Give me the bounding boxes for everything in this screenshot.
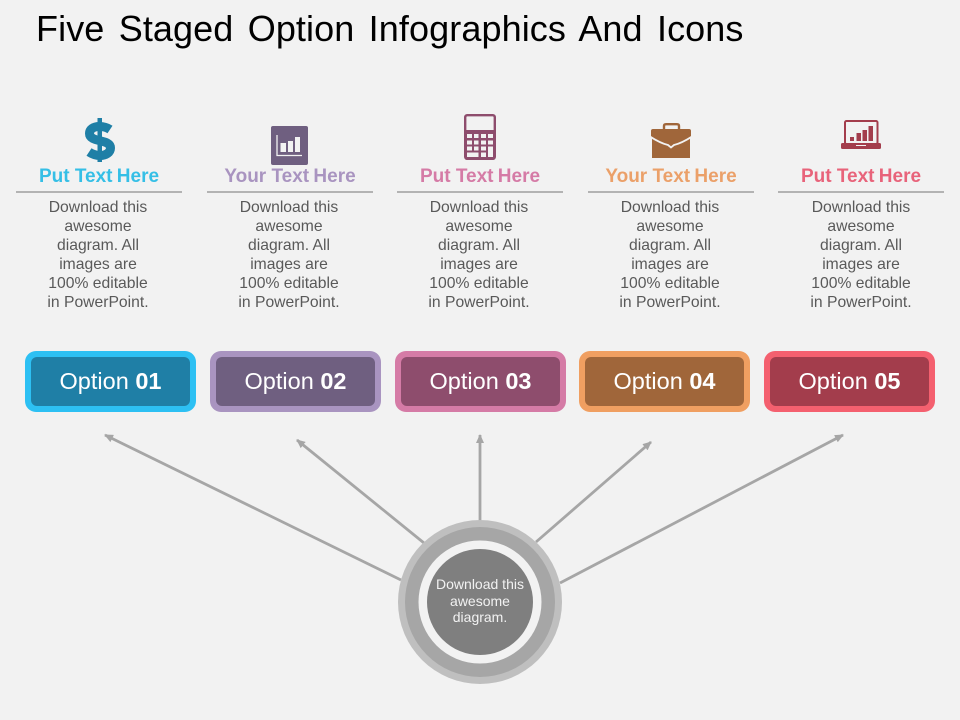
hub text <box>436 576 524 625</box>
text block: awesome <box>827 218 895 235</box>
text block: in PowerPoint. <box>47 294 149 311</box>
hub text: awesome <box>450 592 510 608</box>
text block: awesome <box>255 218 323 235</box>
icon: briefcase <box>651 123 691 158</box>
text block: Download this <box>240 199 338 216</box>
icon: laptop with chart <box>841 120 881 149</box>
arrows fanning from hub to options <box>104 434 844 584</box>
text block: diagram. All <box>57 237 139 254</box>
text block: images are <box>822 256 900 273</box>
heading: Put Text Here <box>39 166 159 187</box>
column 4 <box>588 123 754 311</box>
text block: diagram. All <box>248 237 330 254</box>
text block: images are <box>59 256 137 273</box>
text block: awesome <box>64 218 132 235</box>
divider <box>207 191 373 193</box>
text block: Download this <box>621 199 719 216</box>
text block: awesome <box>636 218 704 235</box>
central hub <box>398 520 562 684</box>
text block: diagram. All <box>438 237 520 254</box>
text block: diagram. All <box>629 237 711 254</box>
text block <box>619 199 721 311</box>
text block: 100% editable <box>48 275 148 292</box>
button: option 04: Option 04 <box>614 368 715 394</box>
hub text: Download this <box>436 576 524 592</box>
text block: Download this <box>49 199 147 216</box>
hub text: diagram. <box>453 609 507 625</box>
divider <box>397 191 563 193</box>
button: option 01 <box>25 351 196 412</box>
column 5 <box>778 120 944 311</box>
button: option 05 <box>764 351 935 412</box>
column 2 <box>207 126 373 311</box>
text block: in PowerPoint. <box>238 294 340 311</box>
button: option 04 <box>579 351 750 412</box>
text block: Download this <box>812 199 910 216</box>
button: option 02: Option 02 <box>245 368 346 394</box>
text block: Download this <box>430 199 528 216</box>
heading: Your Text Here <box>224 166 356 187</box>
text block: diagram. All <box>820 237 902 254</box>
text block: 100% editable <box>620 275 720 292</box>
divider <box>588 191 754 193</box>
column 3 <box>397 114 563 311</box>
button: option 02 <box>210 351 381 412</box>
text block <box>428 199 530 311</box>
button: option 03: Option 03 <box>430 368 531 394</box>
text block: images are <box>440 256 518 273</box>
icon: dollar sign <box>85 118 115 162</box>
column 1 <box>16 118 182 311</box>
icon: bar chart tile <box>271 126 308 165</box>
text block: 100% editable <box>811 275 911 292</box>
text block: images are <box>250 256 328 273</box>
text block: images are <box>631 256 709 273</box>
button: option 05: Option 05 <box>799 368 900 394</box>
text block <box>810 199 912 311</box>
text block: awesome <box>445 218 513 235</box>
text block <box>47 199 149 311</box>
heading: Put Text Here <box>420 166 540 187</box>
title: Five Staged Option Infographics And Icons <box>36 8 744 49</box>
heading: Your Text Here <box>605 166 737 187</box>
text block <box>238 199 340 311</box>
button: option 03 <box>395 351 566 412</box>
text block: in PowerPoint. <box>619 294 721 311</box>
divider <box>16 191 182 193</box>
text block: 100% editable <box>239 275 339 292</box>
divider <box>778 191 944 193</box>
icon: calculator <box>464 114 496 160</box>
button: option 01: Option 01 <box>60 368 161 394</box>
text block: in PowerPoint. <box>428 294 530 311</box>
text block: in PowerPoint. <box>810 294 912 311</box>
text block: 100% editable <box>429 275 529 292</box>
heading: Put Text Here <box>801 166 921 187</box>
